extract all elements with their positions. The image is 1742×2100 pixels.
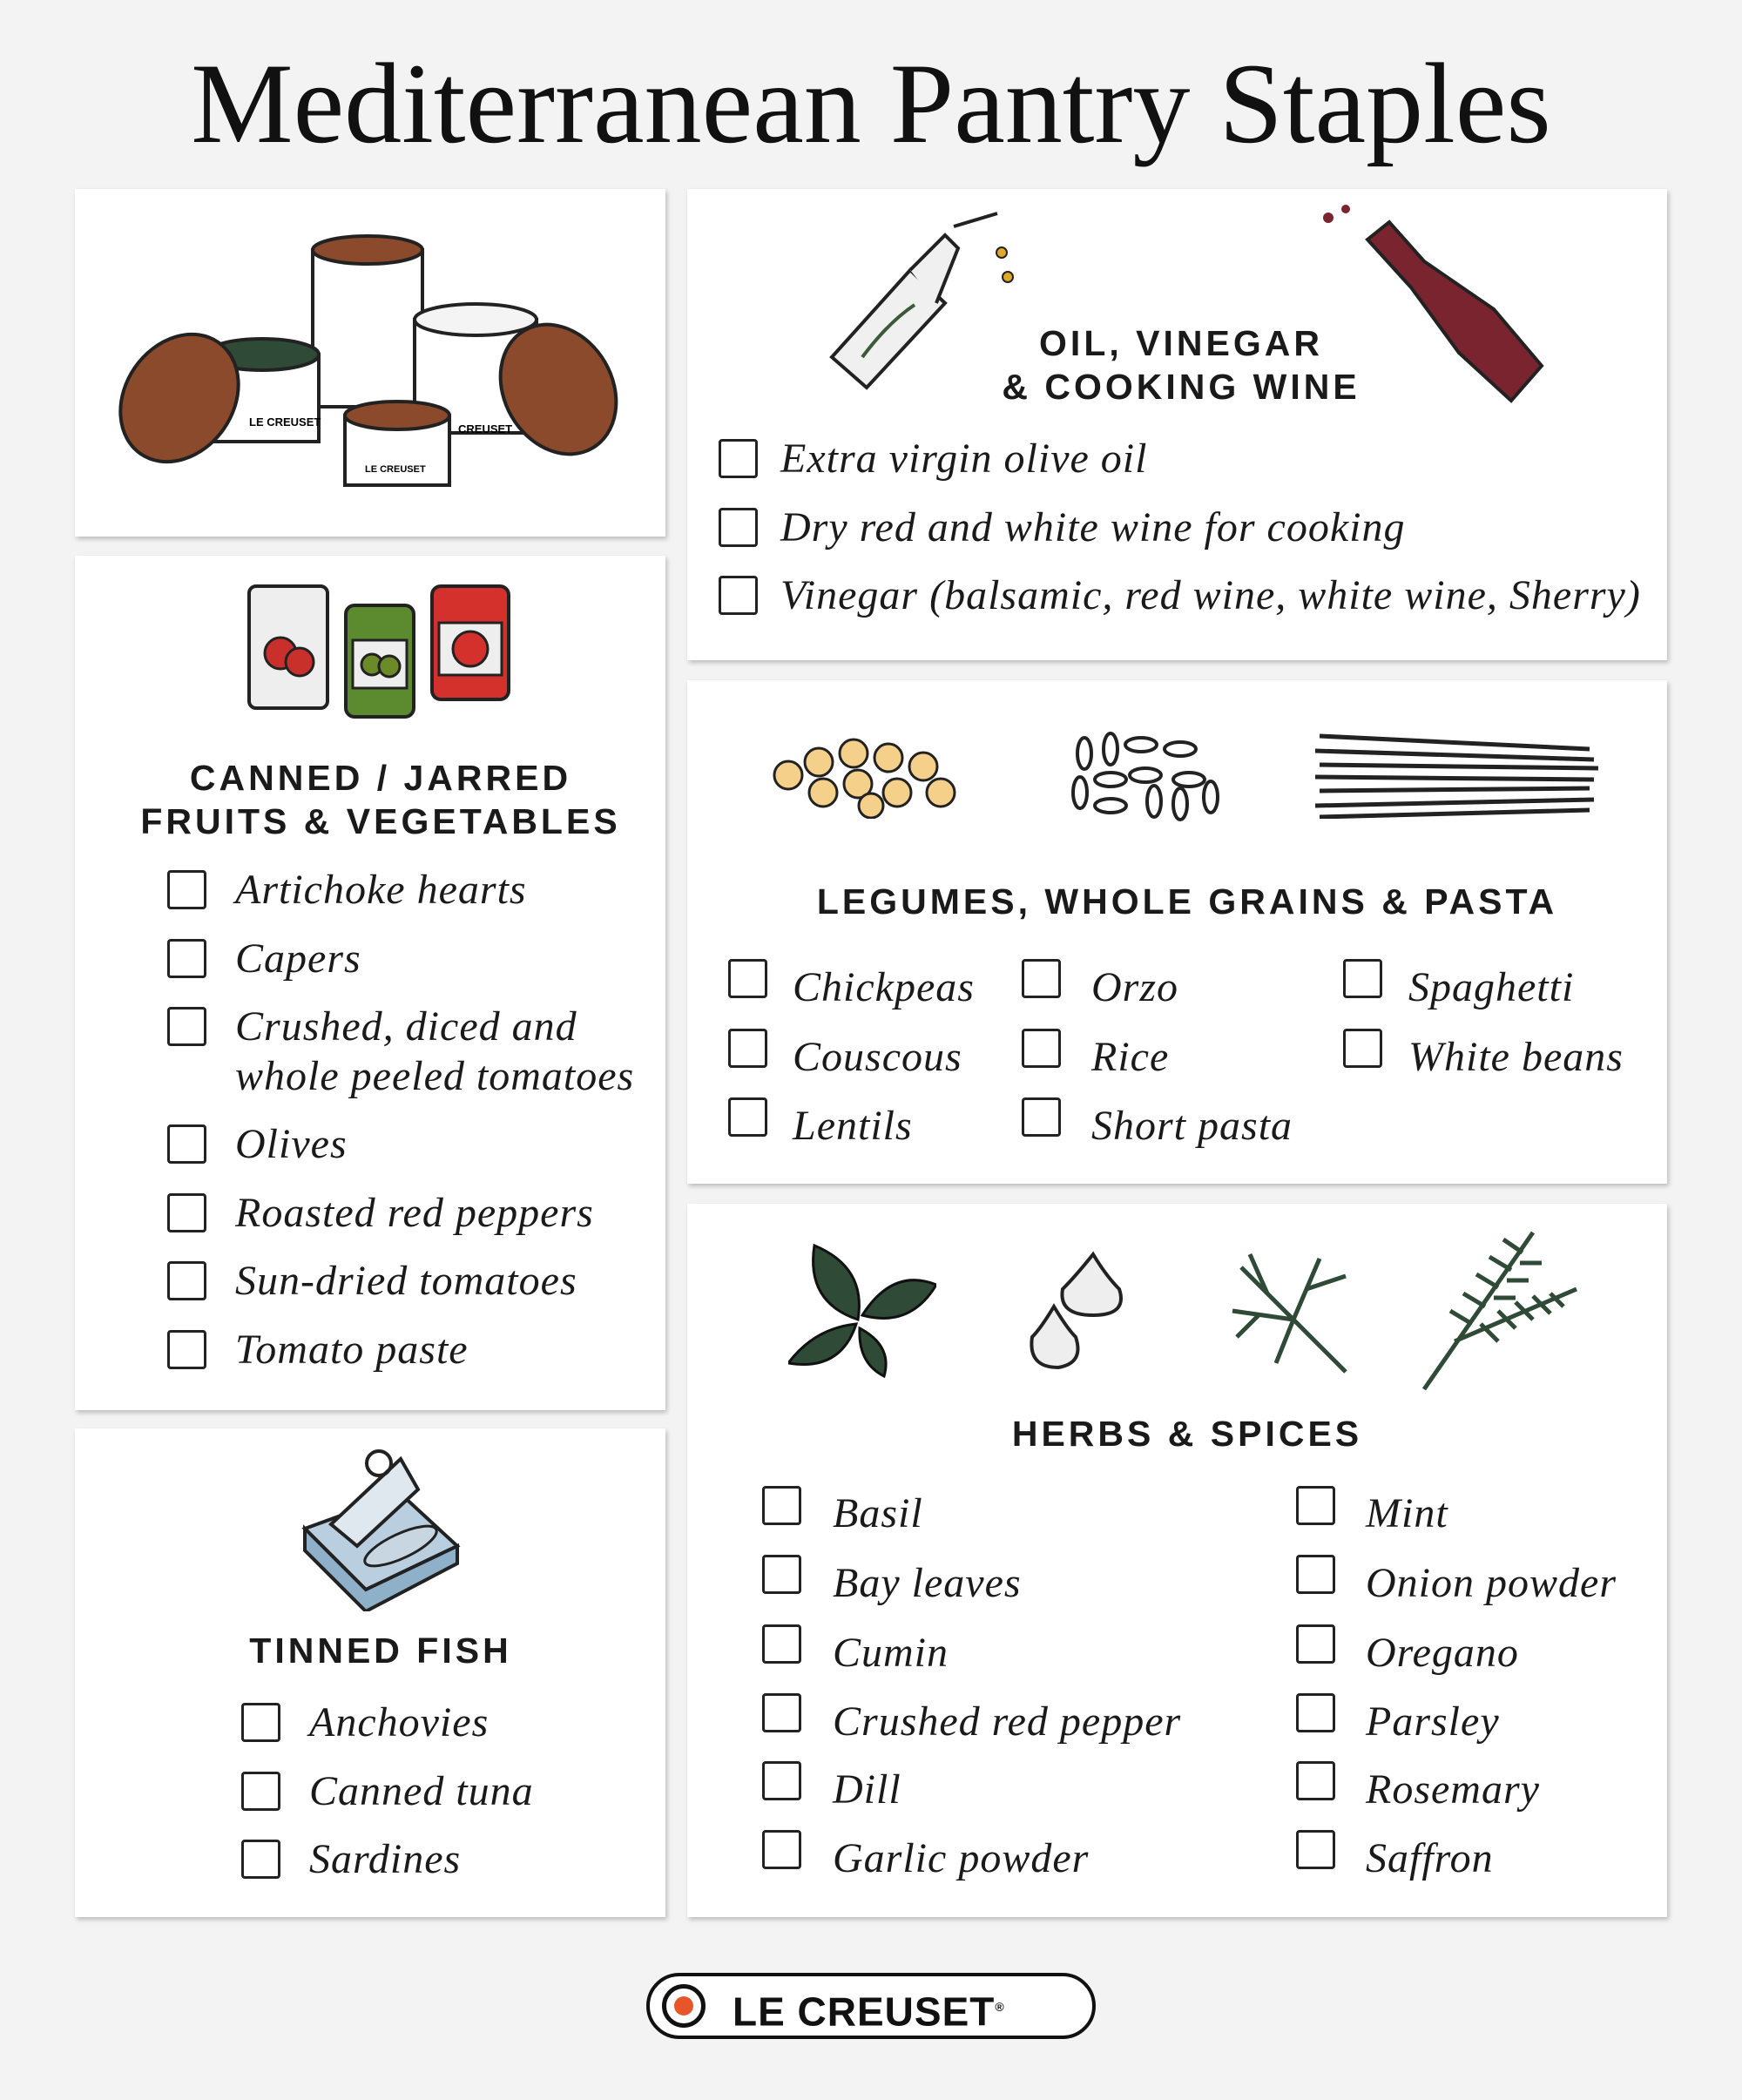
icon: containers: CREUSET [458,422,512,436]
icon: spaghetti [1315,733,1598,819]
text: Parsley [1366,1698,1500,1745]
text: Couscous [793,1034,962,1080]
heading: canned [140,758,621,841]
text: Onion powder [1366,1560,1617,1606]
icon: dill [1232,1253,1347,1374]
icon: rosemary [1422,1232,1577,1390]
icon: rice [1071,732,1219,821]
text: Capers [235,935,361,982]
text: Short pasta [1091,1103,1293,1149]
panel: legumes [687,680,1667,1184]
text: Sardines [309,1836,461,1882]
text: Sun-dried tomatoes [235,1258,577,1304]
icon: containers: LE CREUSET [249,415,321,429]
heading: herbs: HERBS & SPICES [1012,1414,1362,1454]
text: Crushed, diced and [235,1003,577,1050]
heading: canned: CANNED / JARRED [190,758,571,798]
text: Artichoke hearts [235,867,527,913]
list: oil items [719,436,1641,618]
text: Mint [1366,1490,1448,1536]
list: legumes [728,959,1624,1149]
text: Canned tuna [309,1768,534,1814]
panel: cookware illustration [75,189,665,537]
icon: wine bottle [1323,205,1544,403]
text: Bay leaves [833,1560,1022,1606]
text: Rosemary [1366,1766,1540,1813]
text: Olives [235,1121,348,1167]
icon: cans and jars [247,584,510,719]
heading: oil: & COOKING WINE [1002,367,1361,407]
text: Chickpeas [793,964,975,1010]
icon: sardine tin [301,1449,460,1611]
list: canned items [167,867,634,1373]
text: Garlic powder [833,1835,1089,1881]
text: Dry red and white wine for cooking [780,504,1405,550]
text: Spaghetti [1408,964,1574,1010]
title: Mediterranean Pantry Staples [191,39,1551,167]
text: Crushed red pepper [833,1698,1181,1745]
text: Rice [1091,1034,1169,1080]
heading: tinned fish: TINNED FISH [249,1631,512,1671]
icon: containers: LE CREUSET [365,464,426,475]
text: Basil [833,1490,923,1536]
heading: oil [1002,323,1361,407]
logo text: LE CREUSET® [733,1989,1005,2034]
list: tinned fish [241,1699,534,1882]
panel: herbs [687,1204,1667,1917]
text: Dill [833,1766,901,1813]
heading: oil: OIL, VINEGAR [1039,323,1323,363]
text: Lentils [793,1103,913,1149]
text: Orzo [1091,964,1178,1010]
icon: oil bottle [829,212,1014,390]
logo: Le Creuset [646,1973,1096,2039]
text: White beans [1408,1034,1624,1080]
text: Vinegar (balsamic, red wine, white wine, Sherry) [780,572,1641,618]
icon: garlic [1030,1251,1123,1369]
text: Extra virgin olive oil [780,436,1147,482]
text: Anchovies [309,1699,489,1745]
icon: logo circle [662,1984,706,2028]
list: herbs [762,1486,1617,1881]
text: Oregano [1366,1630,1519,1676]
icon: containers [118,234,618,487]
icon: chickpeas [773,739,956,819]
text: whole peeled tomatoes [235,1053,634,1099]
panel: oil vinegar wine [687,189,1667,660]
text: Cumin [833,1630,949,1676]
panel: canned / jarred [75,556,665,1410]
text: Roasted red peppers [235,1190,594,1236]
text: Saffron [1366,1835,1494,1881]
panel: tinned fish [75,1428,665,1917]
icon: basil [788,1244,936,1378]
heading: canned: FRUITS & VEGETABLES [140,801,621,841]
text: Tomato paste [235,1327,469,1373]
heading: legumes: LEGUMES, WHOLE GRAINS & PASTA [817,881,1557,922]
